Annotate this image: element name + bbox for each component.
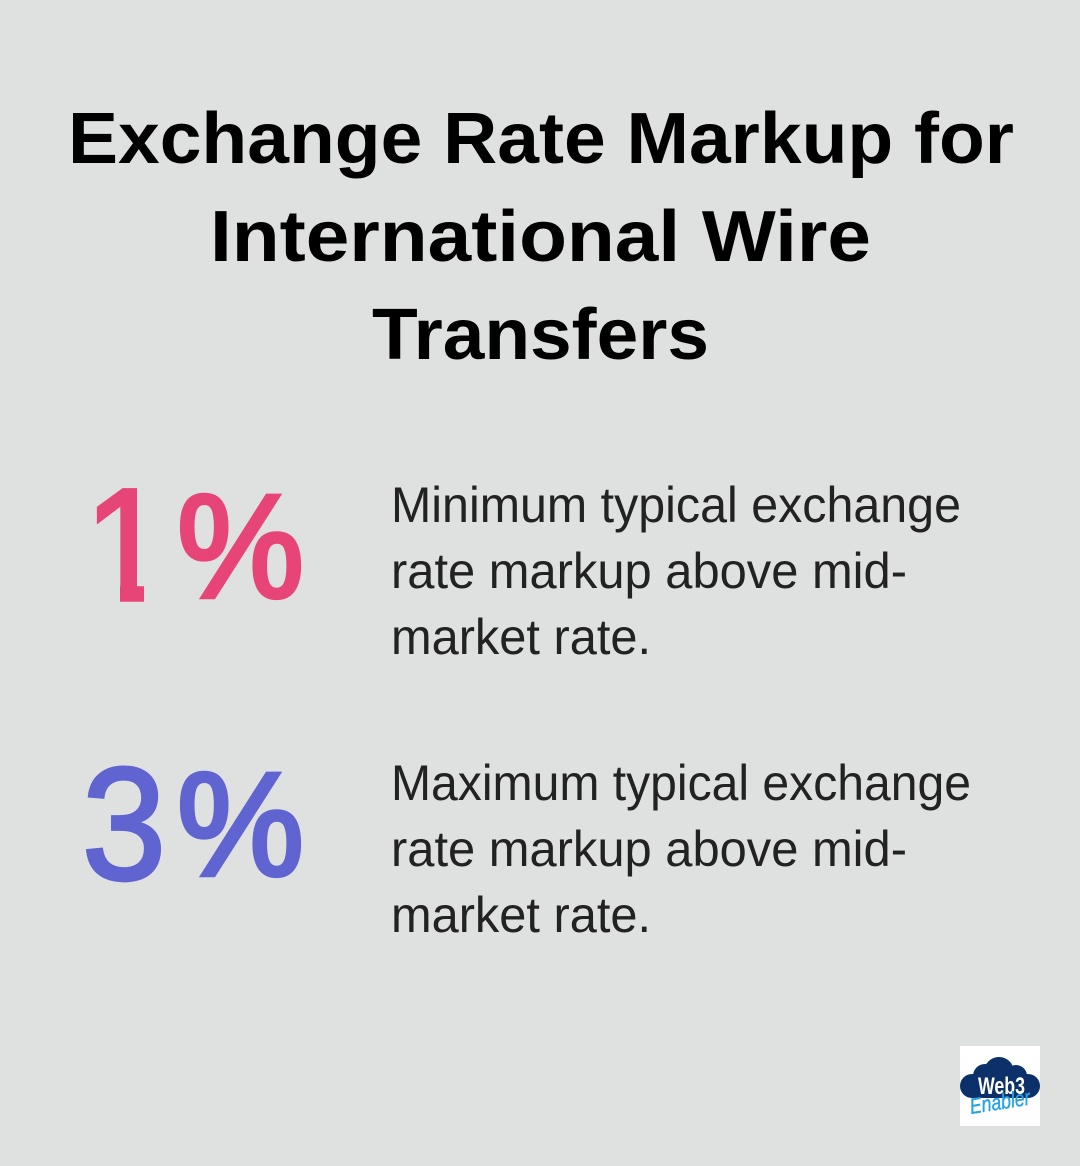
stat description: minimum markup: market rate. <box>391 609 651 665</box>
stat number: 3%: % <box>177 743 304 907</box>
stat number: 1%: % <box>177 465 304 629</box>
stat number: 1% <box>96 488 302 602</box>
icon: cloud <box>960 1057 1040 1098</box>
stat description: maximum markup <box>391 755 971 943</box>
stat number: 3% <box>82 734 304 913</box>
title: Transfers <box>372 295 709 375</box>
stat number: 1%: 1 <box>84 455 168 634</box>
stat description: maximum markup: rate markup above mid- <box>391 821 907 877</box>
stat description: minimum markup: rate markup above mid- <box>391 543 907 599</box>
stat description: maximum markup: Maximum typical exchange <box>391 755 971 811</box>
stat: 1% <box>96 486 959 654</box>
title: Exchange Rate Markup for <box>68 99 1014 179</box>
stat: 3% <box>82 734 971 943</box>
stat description: maximum markup: market rate. <box>391 887 651 943</box>
logo: Web3 Enabler <box>960 1046 1040 1126</box>
title: International Wire <box>210 197 871 277</box>
logo: Web3 Enabler: Enabler <box>968 1084 1033 1119</box>
title <box>68 99 1014 375</box>
stat number: 3%: 3 <box>82 734 166 913</box>
logo wordmark: Web3 <box>978 1073 1025 1100</box>
stat description: minimum markup: Minimum typical exchange <box>391 477 961 533</box>
stat description: minimum markup <box>391 477 961 665</box>
